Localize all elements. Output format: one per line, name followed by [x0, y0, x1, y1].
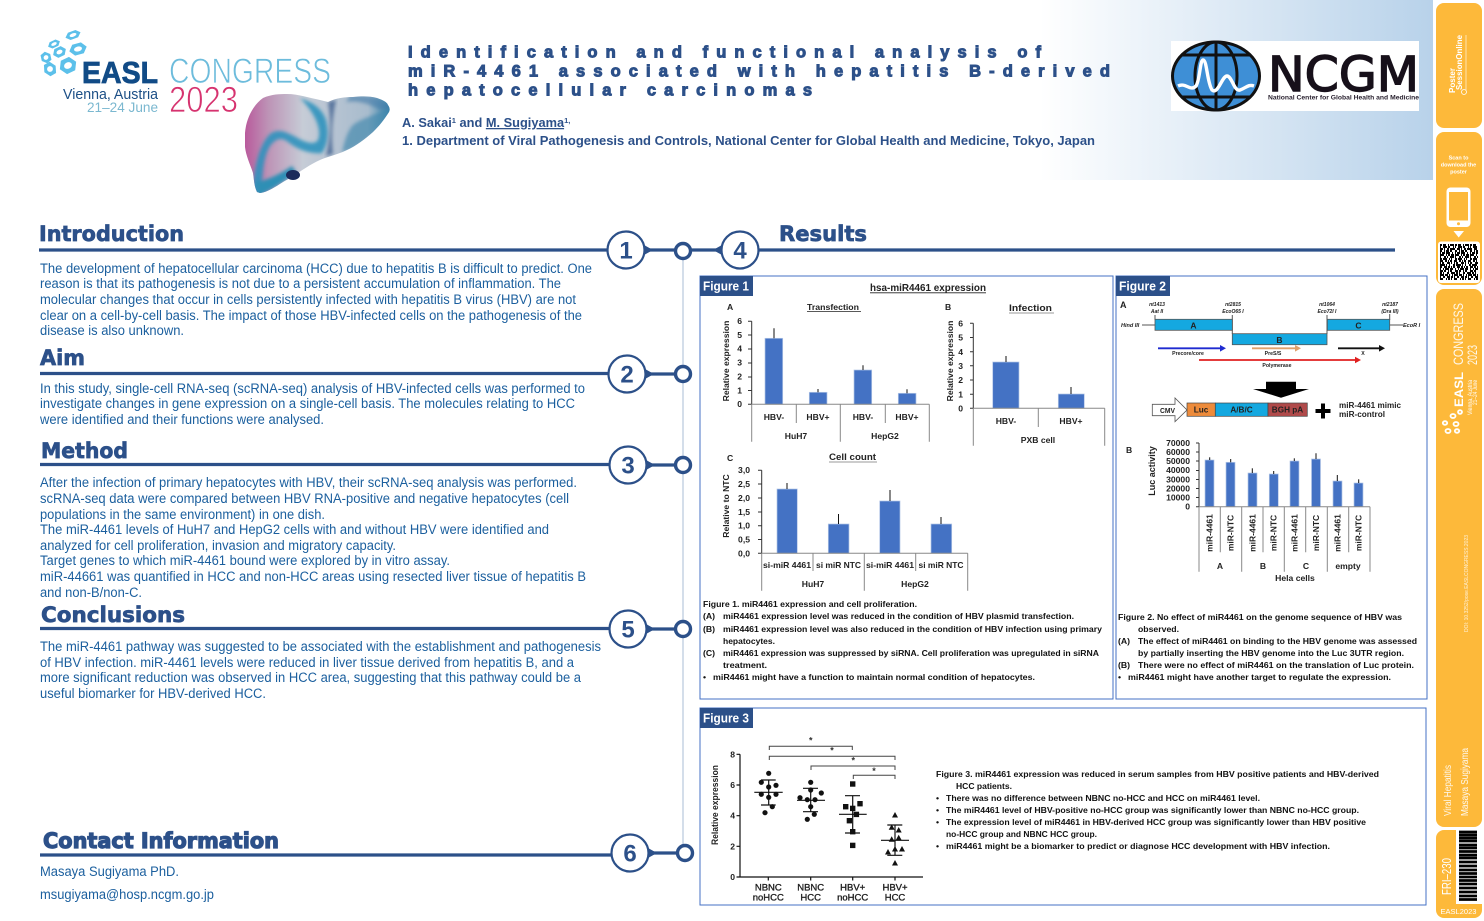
bar chart: luciferase activity: miR-NTC: [1269, 515, 1279, 551]
scatter axis labels: NBNC: [755, 882, 782, 894]
title: miR-4461 associated with hepatitis B-derived: [408, 62, 1110, 80]
scatter axis labels: HCC: [885, 892, 905, 904]
bar chart A: transfection: HBV+: [895, 412, 919, 422]
bar chart B: infection: 4: [958, 347, 963, 357]
heading: Aim: Aim: [40, 346, 85, 370]
bar chart C: cell count: 2,5: [738, 479, 750, 489]
CONGRESS wordmark: CONGRESS: [169, 52, 331, 91]
title: Identification and functional analysis of: [408, 44, 1042, 62]
sidebar CONGRESS label: CONGRESS: [1450, 303, 1466, 365]
figure 1 caption: [703, 599, 1102, 682]
significance brackets: *: [809, 736, 813, 746]
bar chart A: transfection: HBV+: [806, 412, 830, 422]
scatter plot: serum miR4461: [710, 736, 923, 904]
text: introduction body: clear on a cell-by-cell basis. The impact of those HBV-infected cells on the pathogenesis of the: [40, 308, 582, 323]
text: aim body: [39, 381, 585, 427]
significance brackets: *: [872, 766, 876, 776]
heading: Method: Method: [41, 439, 128, 463]
bar chart C: cell count: si-miR 4461: [866, 561, 914, 570]
bar chart: luciferase activity: miR-4461: [1247, 514, 1257, 552]
text: aim body: were identified and their functions were analysed.: [39, 412, 324, 427]
poster id: FRI–230: [1439, 858, 1454, 895]
barcode: [1456, 830, 1482, 904]
text: method body: and non-B/non-C.: [40, 585, 142, 600]
bar chart C: cell count: [721, 452, 968, 591]
figure 1 caption: miR4461 might have a function to maintain normal condition of hepatocytes.: [713, 672, 1035, 682]
text: method body: [40, 475, 586, 600]
text: method body: scRNA-seq data were compared between HBV RNA-positive and negative hepatocytes (cell: [40, 491, 569, 506]
genome construct diagram: X: [1361, 351, 1365, 357]
bar chart A: transfection: HBV-: [764, 412, 784, 422]
text: aim body: In this study, single-cell RNA-seq (scRNA-seq) analysis of HBV-infected cells was performed to: [40, 381, 585, 396]
heading: Conclusions: Conclusions: [41, 603, 185, 627]
scan prompt: [1441, 156, 1476, 176]
sidebar: congress banner: [1436, 289, 1482, 827]
text: conclusions body: useful biomarker for HBV-derived HCC.: [40, 686, 266, 701]
authors: and: [456, 115, 486, 130]
text: method body: miR-44661 was quantified in HCC and non-HCC areas using resected liver tissue of hepatitis B: [40, 569, 586, 584]
figure 3 caption: Figure 3. miR4461 expression was reduced in serum samples from HBV positive patients and HBV-derived: [936, 769, 1379, 779]
sidebar dates: 21–24 June: [1473, 379, 1479, 405]
bar chart: luciferase activity: B: [1126, 445, 1132, 455]
genome construct diagram: A: [1120, 300, 1127, 310]
NCGM wordmark: NCGM: [1268, 47, 1419, 103]
number badge 4: [713, 232, 758, 268]
construct treatment labels: [1339, 401, 1402, 419]
bar chart C: cell count: si-miR 4461: [763, 561, 811, 570]
genome construct diagram: EcoR I: [1403, 323, 1421, 329]
sidebar: poster id and barcode: [1436, 830, 1482, 918]
bar chart A: transfection: 4: [737, 344, 742, 354]
bar chart: luciferase activity: 30000: [1166, 474, 1190, 484]
bar chart: luciferase activity: 70000: [1166, 438, 1190, 448]
genome construct diagram: (Dra III): [1381, 309, 1399, 315]
sidebar: scan to download: [1436, 132, 1482, 285]
luciferase reporter construct: A/B/C: [1230, 406, 1253, 414]
sidebar topic: Viral Hepatitis: [1443, 765, 1454, 816]
scan prompt: download the: [1441, 162, 1476, 168]
bar chart A: transfection: 3: [737, 358, 742, 368]
scatter axis labels: noHCC: [837, 892, 868, 904]
bar chart A: transfection: 0: [737, 399, 742, 409]
bar chart C: cell count: 2,0: [738, 493, 750, 503]
timeline connectors: [39, 250, 1395, 855]
data group: NBNC noHCC: [754, 771, 783, 815]
bar chart: luciferase activity: miR-NTC: [1354, 515, 1364, 551]
scatter plot: serum miR4461: Relative expression: [710, 765, 720, 845]
bar chart B: infection: Relative expression: [945, 321, 955, 401]
header background: [0, 0, 1433, 180]
bar chart: luciferase activity: miR-4461: [1289, 514, 1299, 552]
sidebar presenter: Masaya Sugiyama: [1460, 748, 1471, 816]
figure 2 caption: There were no effect of miR4461 on the translation of Luc protein.: [1138, 660, 1414, 670]
figure 3 caption: [936, 769, 1379, 851]
bar chart A: transfection: [721, 302, 929, 442]
text: conclusions body: more significant reduction was observed in HCC area, suggesting that this pathway could be a: [40, 670, 581, 685]
bar chart B: infection: B: [945, 302, 951, 312]
bar chart C: cell count: HepG2: [901, 579, 929, 589]
figure 3 caption: There was no difference between NBNC no-HCC and HCC on miR4461 level.: [946, 793, 1260, 803]
bar chart: luciferase activity: miR-4461: [1332, 514, 1342, 552]
text: introduction body: disease is also unknown.: [40, 323, 184, 338]
bar chart B: infection: [945, 302, 1105, 446]
bar chart: luciferase activity: miR-NTC: [1311, 515, 1321, 551]
figure 2 caption: The effect of miR4461 on binding to the HBV genome was assessed: [1138, 636, 1417, 646]
EASL wordmark: EASL: [82, 55, 158, 90]
genome construct diagram: C: [1355, 320, 1362, 330]
figure 3 caption: The expression level of miR4461 in HBV-derived HCC group was significantly lower than HBV positive: [946, 817, 1366, 827]
year: 2023: [169, 79, 238, 120]
luciferase reporter construct: Luc: [1194, 406, 1209, 414]
number badge 1: [608, 232, 653, 268]
bar chart: luciferase activity: C: [1303, 561, 1309, 571]
bar chart: luciferase activity: B: [1260, 561, 1266, 571]
figure 1 caption: miR4461 expression level was reduced in the condition of HBV plasmid transfection.: [723, 611, 1074, 621]
scatter plot: serum miR4461: 0: [730, 872, 735, 882]
luciferase reporter construct: BGH pA: [1272, 406, 1303, 414]
NCGM logo: [1171, 41, 1420, 111]
text: method body: populations in the same environment) in one dish.: [40, 507, 325, 522]
number badge 2: [608, 356, 654, 392]
bar chart C: cell count: 1,5: [738, 507, 750, 517]
heading: Introduction: Introduction: [39, 222, 184, 246]
genome construct diagram: A: [1190, 320, 1197, 330]
number badge 4: 4: [733, 238, 747, 264]
poster session online wordmark: SessionOnline: [1455, 34, 1464, 90]
luciferase reporter construct: CMV: [1160, 406, 1175, 415]
text: contact email: msugiyama@hosp.ncgm.go.jp: [40, 887, 214, 902]
bar chart A: transfection: 2: [737, 372, 742, 382]
sidebar EASL: EASL: [1452, 372, 1466, 407]
bar chart: luciferase activity: miR-NTC: [1226, 515, 1236, 551]
number badge 6: 6: [623, 840, 637, 868]
genome construct diagram: Aat II: [1150, 309, 1164, 315]
bar chart C: cell count: Relative to NTC: [721, 474, 731, 538]
number badge 3: [610, 446, 655, 484]
bar chart A: transfection: Transfection: [807, 302, 859, 312]
number badge 6: [612, 834, 657, 872]
text: introduction body: [40, 261, 592, 338]
bar chart: luciferase activity: 20000: [1166, 483, 1190, 493]
bar chart B: infection: 3: [958, 361, 963, 371]
figure 2 caption: •: [1118, 672, 1121, 682]
figure 3 caption: •: [936, 817, 939, 827]
text: aim body: investigate changes in gene expression on a single-cell basis. The molecules relating to HCC: [40, 396, 575, 411]
construct treatment labels: miR-4461 mimic: [1339, 401, 1402, 410]
bar chart A: transfection: HepG2: [871, 431, 899, 441]
bar chart C: cell count: 0,5: [738, 534, 750, 544]
title: hepatocellular carcinomas: [408, 82, 812, 100]
number badge 2: 2: [620, 362, 634, 388]
scatter plot: serum miR4461: 8: [730, 750, 735, 760]
bar chart: luciferase activity: miR-4461: [1204, 514, 1214, 552]
title: [408, 44, 1110, 100]
poster session online wordmark: Poster: [1448, 68, 1457, 93]
figure 2 caption: observed.: [1138, 624, 1179, 634]
heading: Contact Information: Contact Information: [43, 829, 279, 853]
bar chart: luciferase activity: 0: [1185, 502, 1190, 512]
bar chart C: cell count: si miR NTC: [816, 561, 861, 570]
bar chart B: infection: 1: [958, 390, 963, 400]
icon: hexagon cluster: [38, 29, 88, 78]
figure 1 caption: hepatocytes.: [723, 636, 775, 646]
figure 1 caption: (C): [703, 648, 715, 658]
significance brackets: *: [830, 746, 834, 756]
genome construct diagram: nt1413: [1149, 302, 1165, 308]
bar chart C: cell count: 0,0: [738, 548, 750, 558]
figure 3 caption: HCC patients.: [956, 781, 1012, 791]
figure 2 caption: (B): [1118, 660, 1130, 670]
text: introduction body: reason is that its pathogenesis is not due to a persistent accumulation of inflammation. The: [40, 276, 561, 291]
figure 1 caption: miR4461 expression level was also reduced in the condition of HBV infection using primary: [723, 624, 1102, 634]
bar chart: luciferase activity: Hela cells: [1275, 573, 1315, 583]
figure 1 caption: (B): [703, 624, 715, 634]
significance brackets: [769, 736, 895, 779]
bar chart B: infection: 5: [958, 332, 963, 342]
easl 2023 tag: EASL2023: [1440, 907, 1476, 916]
data group: HBV+ noHCC: [839, 781, 867, 848]
plus sign: [1316, 404, 1330, 418]
dates: 21–24 June: [87, 99, 158, 115]
poster session online wordmark: [1448, 34, 1464, 93]
genome construct diagram: EcoO65 I: [1222, 309, 1244, 315]
text: method body: The miR-4461 levels of HuH7 and HepG2 cells with and without HBV were identified and: [40, 522, 549, 537]
genome construct diagram: nt2187: [1382, 302, 1398, 308]
scatter plot: serum miR4461: 4: [730, 810, 735, 820]
bar chart C: cell count: HuH7: [802, 579, 824, 589]
panel: Figure 2: [1116, 276, 1427, 699]
bar chart B: infection: 6: [958, 318, 963, 328]
bar chart B: infection: Infection: [1009, 303, 1052, 314]
NCGM full name: National Center for Global Health and Medicine: [1268, 96, 1420, 102]
authors: A. Sakai: [402, 115, 452, 130]
scatter plot: serum miR4461: 6: [730, 780, 735, 790]
scatter axis labels: noHCC: [753, 892, 784, 904]
figure 1 heading: hsa-miR4461 expression: [870, 283, 986, 294]
bar chart: luciferase activity: 60000: [1166, 447, 1190, 457]
authors: M. Sugiyama: [486, 115, 565, 130]
luciferase reporter construct: [1152, 398, 1307, 422]
bar chart C: cell count: 1,0: [738, 520, 750, 530]
number badge 3: 3: [621, 452, 635, 480]
figure 3 caption: •: [936, 793, 939, 803]
scan prompt: Scan to: [1449, 156, 1469, 162]
text: method body: analyzed for cell proliferation, invasion and migratory capacity.: [40, 538, 396, 553]
bar chart: luciferase activity: A: [1217, 561, 1223, 571]
construct treatment labels: miR-control: [1339, 410, 1385, 419]
text: conclusions body: of HBV infection. miR-4461 levels were reduced in liver tissue derived from hepatitis B, and a: [40, 655, 574, 670]
figure 3 caption: •: [936, 805, 939, 815]
bar chart B: infection: PXB cell: [1021, 435, 1055, 445]
bar chart: luciferase activity: 10000: [1166, 492, 1190, 502]
sidebar: poster session online: [1436, 3, 1482, 128]
bar chart B: infection: 2: [958, 375, 963, 385]
text: contact name: Masaya Sugiyama PhD.: [40, 864, 179, 879]
icon: sidebar hexagons: [1443, 410, 1462, 433]
bar chart A: transfection: 6: [737, 316, 742, 326]
scan prompt: poster: [1450, 170, 1468, 176]
bar chart: luciferase activity: 50000: [1166, 456, 1190, 466]
figure 3 caption: no-HCC group and NBNC HCC group.: [946, 829, 1097, 839]
figure 3 caption: The miR4461 level of HBV-positive no-HCC group was significantly lower than NBNC no-HCC group.: [946, 805, 1359, 815]
number badge 1: 1: [619, 238, 633, 264]
text: method body: After the infection of primary hepatocytes with HBV, their scRNA-seq analysis was performed.: [40, 475, 577, 490]
figure 1 caption: (A): [703, 611, 715, 621]
figure 1 caption: treatment.: [723, 660, 767, 670]
bar chart C: cell count: 3,0: [738, 465, 750, 475]
sidebar year: 2023: [1464, 345, 1480, 365]
genome construct diagram: Polymerase: [1262, 363, 1292, 369]
figure 2 caption: by partially inserting the HBV genome into the Luc 3UTR region.: [1138, 648, 1404, 658]
bar chart A: transfection: HBV-: [853, 412, 873, 422]
bar chart B: infection: HBV+: [1059, 416, 1083, 426]
bar chart C: cell count: si miR NTC: [918, 561, 964, 570]
figure 2 caption: Figure 2. No effect of miR4461 on the genome sequence of HBV was: [1118, 612, 1402, 622]
figure 1 tag: Figure 1: [703, 278, 749, 294]
figure 2 caption: (A): [1118, 636, 1130, 646]
text: introduction body: molecular changes that occur in cells persistently infected with hepatitis B virus (HBV) are not: [40, 292, 576, 307]
bar chart C: cell count: Cell count: [829, 452, 877, 463]
figure 3 caption: •: [936, 841, 939, 851]
scatter axis labels: HCC: [800, 892, 821, 904]
icon: phone: [1446, 188, 1470, 238]
text: conclusions body: [40, 639, 601, 701]
genome construct diagram: nt2815: [1225, 302, 1241, 308]
genome construct diagram: PreS/S: [1265, 351, 1282, 357]
bar chart: luciferase activity: Luc activity: [1147, 446, 1157, 496]
authors: 1: [452, 116, 456, 125]
bar chart: luciferase activity: 40000: [1166, 465, 1190, 475]
scatter axis labels: HBV+: [840, 882, 866, 894]
figure 2 tag: Figure 2: [1119, 278, 1166, 294]
figure 3 caption: miR4461 might be a biomarker to predict or diagnose HCC development with HBV infection.: [946, 841, 1330, 851]
bar chart B: infection: HBV-: [996, 416, 1016, 426]
arrow: construct down arrow: [1253, 382, 1309, 398]
genome construct diagram: Hind III: [1121, 323, 1140, 329]
text: introduction body: The development of hepatocellular carcinoma (HCC) due to hepatitis B is difficult to predict. One: [40, 261, 592, 276]
genome construct diagram: B: [1276, 335, 1283, 345]
figure 1 caption: Figure 1. miR4461 expression and cell proliferation.: [703, 599, 917, 609]
significance brackets: *: [852, 756, 856, 766]
number badge 5: 5: [621, 616, 635, 644]
figure 1 caption: miR4461 expression was suppressed by siRNA. Cell proliferation was upregulated in siRNA: [723, 648, 1100, 658]
sidebar DOI: DOI: 10.3252/pose.EASLCONGRESS.2023: [1464, 535, 1470, 632]
number badge 5: [610, 610, 655, 648]
bar chart A: transfection: Relative expression: [721, 321, 731, 401]
bar chart A: transfection: 5: [737, 330, 742, 340]
figure 1 caption: •: [703, 672, 706, 682]
scatter axis labels: HBV+: [882, 882, 908, 894]
data group: HBV+ HCC: [881, 812, 909, 866]
data group: NBNC HCC: [797, 780, 825, 822]
genome construct diagram: [1120, 300, 1421, 369]
genome construct diagram: nt1064: [1319, 302, 1335, 308]
figure 3 tag: Figure 3: [703, 710, 749, 726]
authors: 1,: [564, 116, 570, 125]
figure 2 caption: [1118, 612, 1417, 682]
bar chart: luciferase activity: empty: [1335, 561, 1361, 571]
timeline node rings: [676, 244, 692, 860]
figure 2 caption: miR4461 might have another target to regulate the expression.: [1128, 672, 1391, 682]
panel: Figure 3: [700, 708, 1426, 905]
bar chart A: transfection: A: [727, 302, 733, 312]
text: method body: Target genes to which miR-4461 bound were explored by in vitro assay.: [40, 553, 450, 568]
sidebar location: Vienna, Austria: [1467, 380, 1474, 415]
heading: Results: Results: [779, 222, 867, 246]
EASL Congress logo: [38, 29, 331, 120]
genome construct diagram: Eco72I I: [1318, 309, 1337, 315]
scatter axis labels: NBNC: [797, 882, 824, 894]
icon: liver illustration: [245, 94, 392, 196]
text: conclusions body: The miR-4461 pathway was suggested to be associated with the establishment and pathogenesis: [40, 639, 601, 654]
bar chart A: transfection: 1: [737, 386, 742, 396]
bar chart B: infection: 0: [958, 404, 963, 414]
icon: NCGM globe: [1172, 42, 1260, 110]
bar chart: luciferase activity: [1126, 438, 1370, 583]
QR code: [1438, 242, 1480, 283]
bar chart C: cell count: C: [727, 453, 733, 463]
location: Vienna, Austria: [63, 87, 159, 103]
panel: Figure 1: [700, 276, 1113, 699]
bar chart A: transfection: HuH7: [785, 431, 807, 441]
scatter plot: serum miR4461: 2: [730, 842, 735, 852]
genome construct diagram: Precore/core: [1172, 351, 1204, 357]
affiliation: 1. Department of Viral Pathogenesis and Controls, National Center for Global Health and Medicine, Tokyo, Japan: [402, 134, 1095, 148]
scatter axis labels: [753, 882, 908, 904]
